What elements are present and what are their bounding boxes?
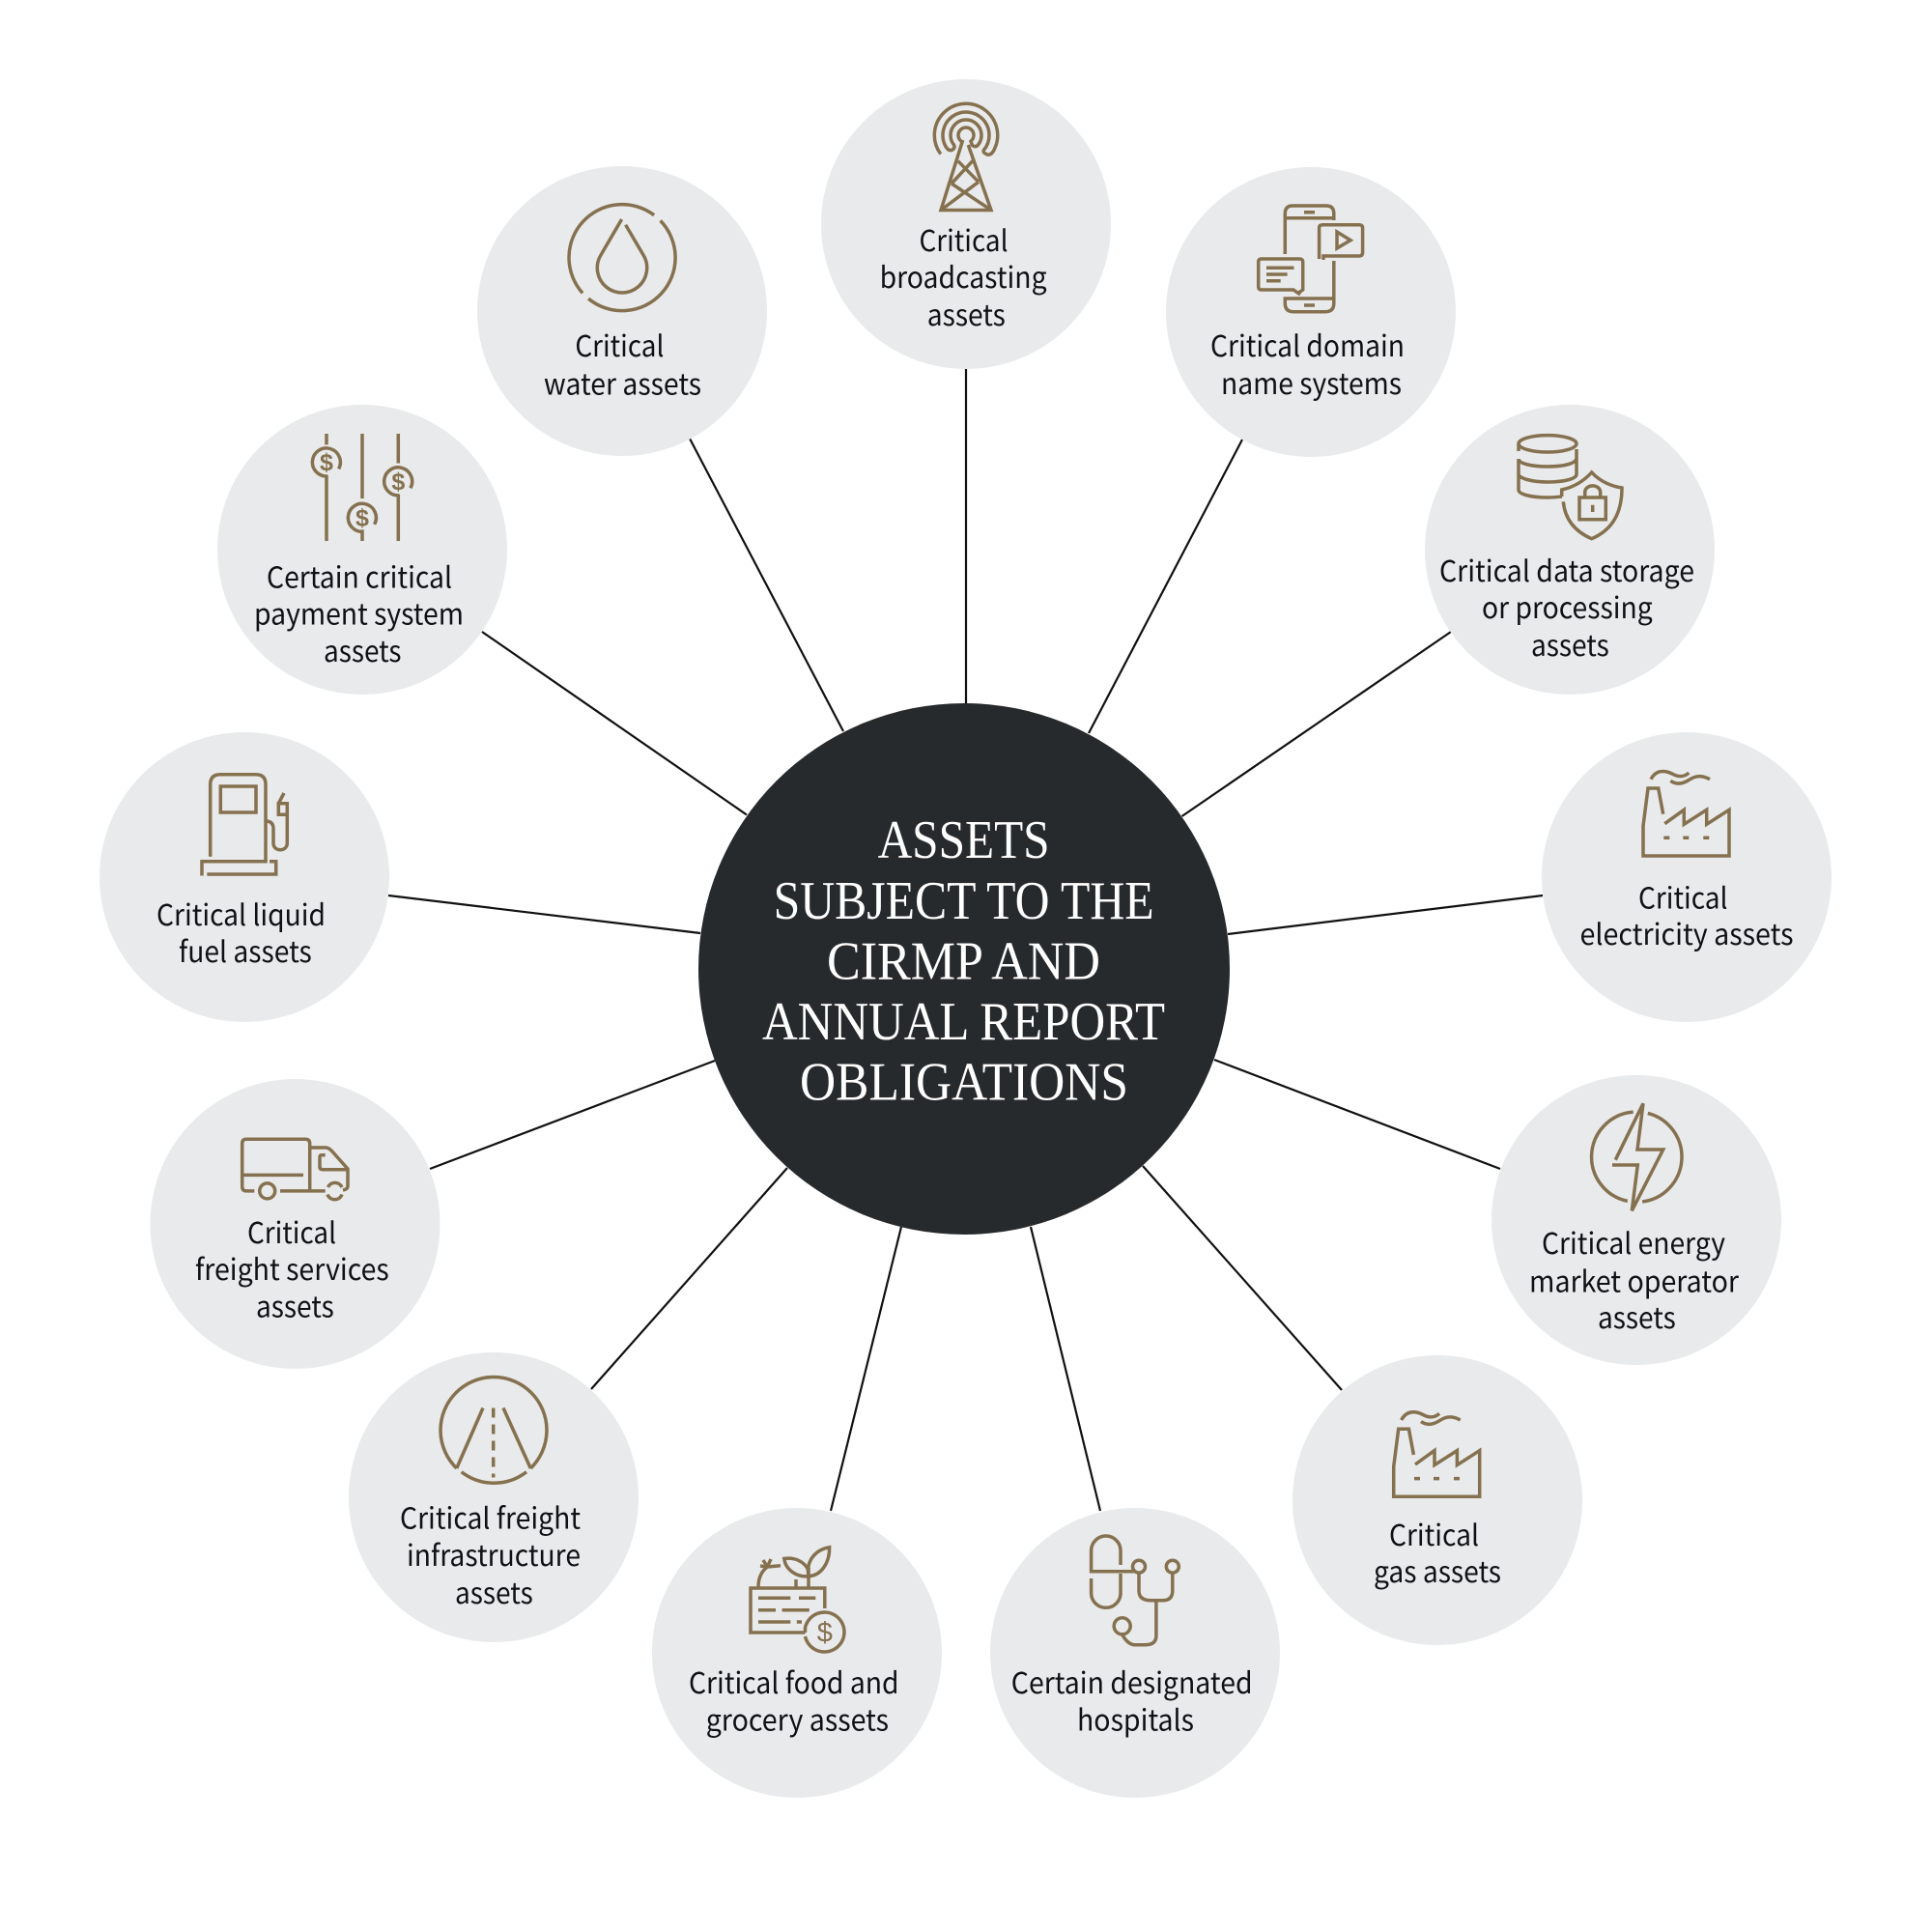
- panel: critical energy market operator assets: [1492, 1075, 1781, 1365]
- label: electricity assets: [1580, 911, 1793, 953]
- icon: dollar sliders: $: [355, 504, 369, 531]
- title: SUBJECT TO THE: [774, 871, 1154, 931]
- icon: fuel pump: [202, 775, 287, 875]
- icon: broadcast tower: [934, 103, 998, 211]
- label: Critical energy: [1542, 1220, 1725, 1263]
- label: Critical liquid: [156, 892, 326, 934]
- label: assets: [1531, 622, 1609, 665]
- label: Certain critical: [267, 554, 452, 596]
- label: [400, 1495, 581, 1612]
- label: Critical: [1638, 875, 1727, 918]
- icon: lightning bolt: [1592, 1103, 1682, 1210]
- icon: stethoscope and pill: [1092, 1536, 1179, 1645]
- title: ANNUAL REPORT: [762, 992, 1165, 1052]
- label: broadcasting: [880, 254, 1047, 297]
- label: water assets: [544, 361, 701, 404]
- label: or processing: [1482, 584, 1653, 627]
- label: infrastructure: [407, 1532, 581, 1575]
- label: [880, 217, 1047, 334]
- panel: certain critical payment system assets: [217, 405, 507, 695]
- label: [195, 1209, 389, 1325]
- title: [762, 810, 1165, 1113]
- icon: database and shield: [1519, 436, 1622, 539]
- label: Critical freight: [400, 1495, 581, 1538]
- panel: critical water assets: [477, 166, 767, 456]
- label: Critical domain: [1210, 323, 1405, 365]
- label: assets: [256, 1283, 334, 1325]
- label: Critical: [575, 323, 664, 365]
- label: [689, 1660, 899, 1739]
- label: name systems: [1221, 360, 1402, 403]
- label: fuel assets: [179, 928, 312, 971]
- label: Critical: [1389, 1512, 1479, 1554]
- label: market operator: [1529, 1258, 1739, 1300]
- icon: factory: [1643, 771, 1729, 856]
- icon: produce with invoice and coin: [751, 1548, 844, 1652]
- label: [1374, 1512, 1501, 1591]
- label: [1529, 1220, 1739, 1337]
- label: hospitals: [1077, 1696, 1194, 1739]
- label: gas assets: [1374, 1548, 1501, 1591]
- panel: critical data storage or processing assets: [1425, 405, 1715, 695]
- title: OBLIGATIONS: [800, 1053, 1128, 1113]
- label: grocery assets: [706, 1696, 889, 1739]
- label: [1580, 875, 1793, 953]
- panel: critical liquid fuel assets: [99, 732, 389, 1022]
- label: Critical data storage: [1439, 548, 1694, 590]
- label: payment system: [254, 591, 464, 634]
- panel: critical food and grocery assets: [652, 1508, 942, 1798]
- label: [1439, 548, 1694, 665]
- icon: dollar sliders: [312, 434, 412, 541]
- icon: dollar sliders: $: [320, 449, 333, 476]
- panel: critical broadcasting assets: [821, 79, 1111, 369]
- icon: road: [440, 1378, 547, 1483]
- icon: truck: [242, 1139, 348, 1200]
- label: assets: [927, 292, 1006, 334]
- label: [254, 554, 464, 670]
- label: [156, 892, 326, 971]
- title: CIRMP AND: [827, 931, 1100, 991]
- label: Critical: [247, 1209, 336, 1252]
- icon: factory: [1394, 1412, 1480, 1496]
- title: ASSETS: [878, 810, 1050, 870]
- panel: critical electricity assets: [1542, 732, 1832, 1022]
- panel: certain designated hospitals: [990, 1508, 1280, 1798]
- label: Critical: [920, 217, 1009, 260]
- icon: phone with chat bubbles: [1259, 206, 1363, 312]
- label: Critical food and: [689, 1660, 899, 1702]
- label: [1210, 323, 1405, 403]
- label: assets: [324, 628, 402, 670]
- icon: water drop: [569, 205, 675, 311]
- panel: critical freight infrastructure assets: [349, 1352, 639, 1642]
- label: Certain designated: [1011, 1660, 1253, 1702]
- label: freight services: [195, 1246, 389, 1289]
- label: assets: [1598, 1294, 1676, 1337]
- panel: centre circle: [698, 703, 1230, 1235]
- panel: critical freight services assets: [151, 1079, 440, 1369]
- connector lines: [388, 367, 1543, 1511]
- label: [1011, 1660, 1253, 1739]
- icon: dollar sliders: $: [391, 469, 405, 496]
- label: assets: [455, 1570, 533, 1612]
- panel: critical gas assets: [1293, 1355, 1582, 1645]
- panel: critical domain name systems: [1166, 167, 1456, 457]
- label: [544, 323, 701, 404]
- icon: produce with invoice and coin: $: [817, 1617, 833, 1648]
